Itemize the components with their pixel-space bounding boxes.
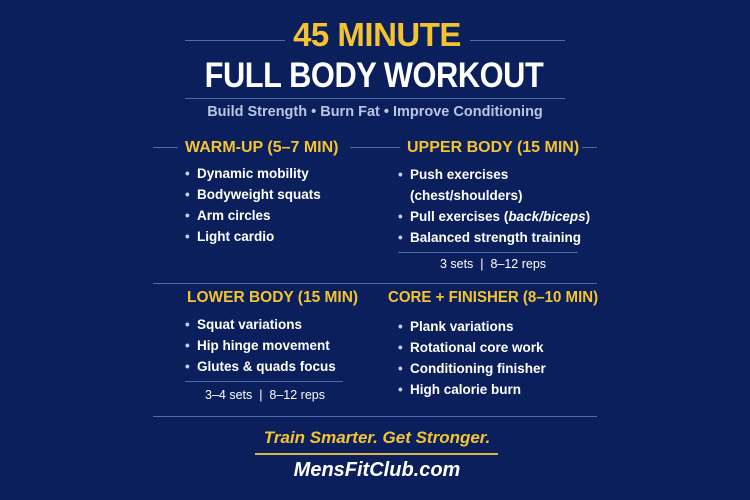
sets: upper: 3 sets | 8–12 reps [440,257,546,271]
title line 1: 45 MINUTE [293,16,461,53]
list: warm-up: Light cardio [197,229,274,244]
sets: lower: 3–4 sets | 8–12 reps [205,388,325,402]
title line 2: FULL BODY WORKOUT [205,56,543,95]
heading: lower body: LOWER BODY (15 MIN) [187,289,358,306]
list: lower body: Hip hinge movement [197,338,330,353]
list: warm-up: Bodyweight squats [197,187,321,202]
tagline: Train Smarter. Get Stronger. [264,428,490,447]
heading: upper body: UPPER BODY (15 MIN) [407,139,579,156]
list: upper body: Pull exercises (back/biceps) [410,209,590,224]
list: warm-up: Dynamic mobility [197,166,309,181]
heading: core: CORE + FINISHER (8–10 MIN) [388,289,598,306]
list: core: Conditioning finisher [410,361,546,376]
heading: warm-up: WARM-UP (5–7 MIN) [185,139,338,156]
list: lower body: Squat variations [197,317,302,332]
list: core: Plank variations [410,319,514,334]
list: lower body [185,317,336,374]
list: core: Rotational core work [410,340,544,355]
list: upper body: (chest/shoulders) [410,188,523,203]
subtitle: Build Strength • Burn Fat • Improve Conditioning [207,104,543,120]
panel: core [388,289,598,397]
list: core [398,319,546,397]
website: MensFitClub.com [294,459,460,481]
list: core: High calorie burn [410,382,521,397]
list: upper body [398,167,590,245]
list: upper body: Balanced strength training [410,230,581,245]
list: warm-up [185,166,321,244]
panel: upper body [398,139,590,271]
list: warm-up: Arm circles [197,208,271,223]
list: lower body: Glutes & quads focus [197,359,336,374]
panel: warm-up [185,139,338,244]
panel: lower body [185,289,358,402]
list: upper body: Push exercises [410,167,508,182]
